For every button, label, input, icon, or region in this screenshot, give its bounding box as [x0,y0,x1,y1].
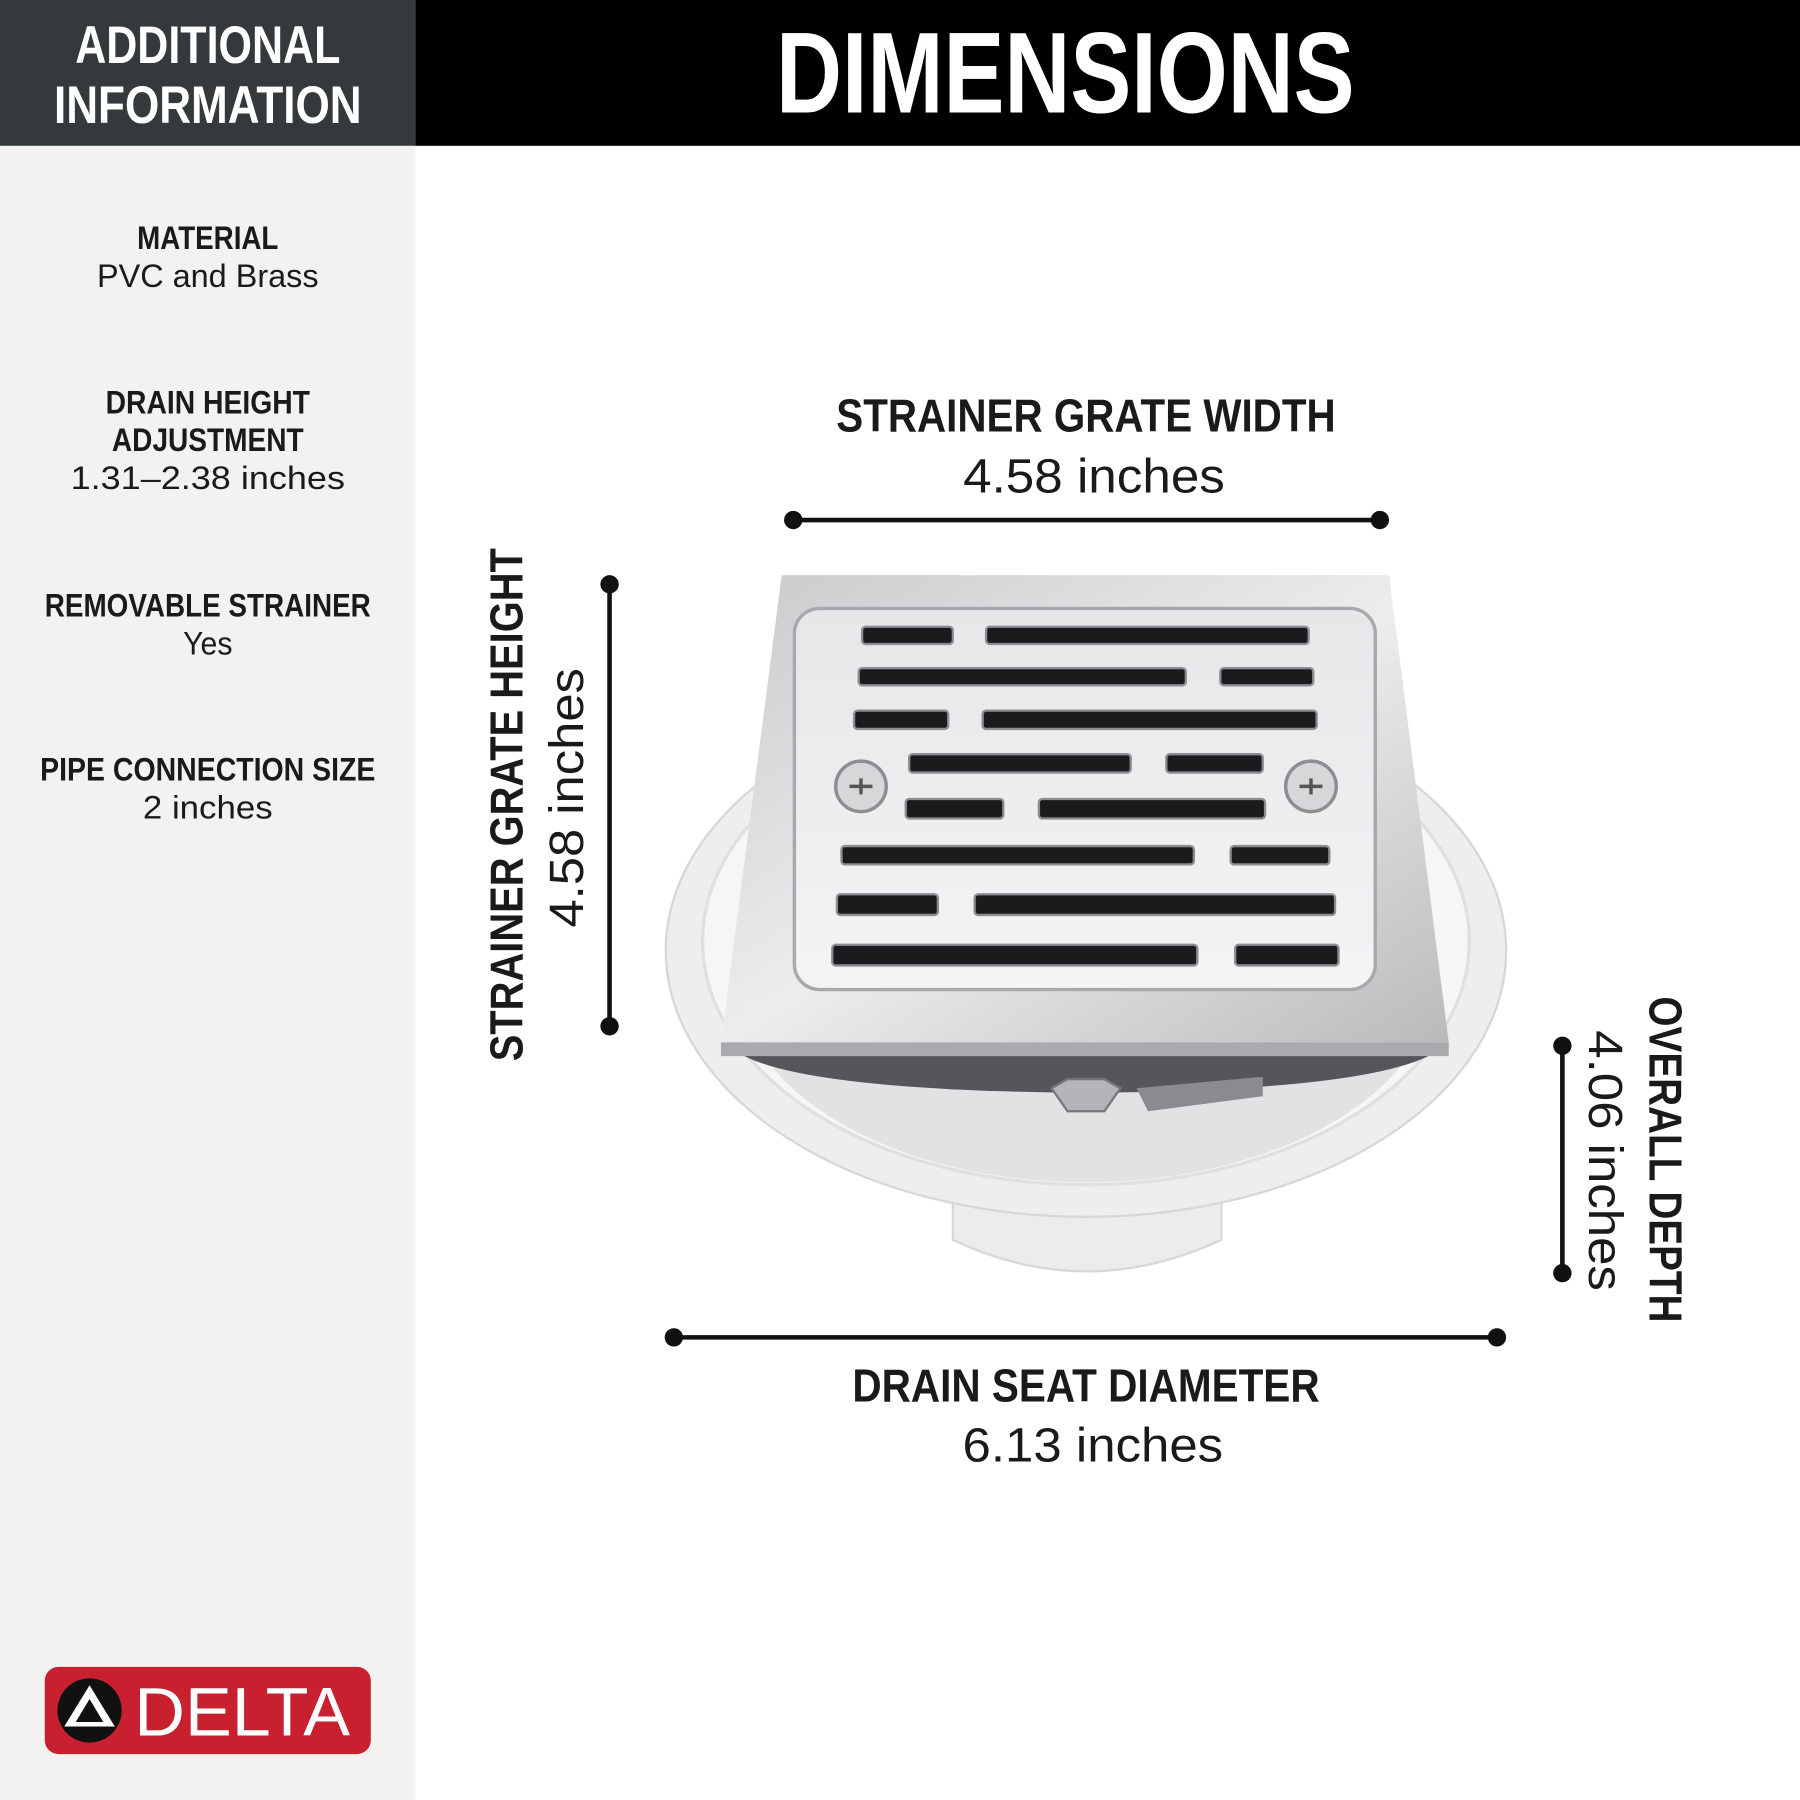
pipe [953,1148,1221,1271]
grate bezel [721,575,1449,1042]
label: strainer grate width [836,390,1336,503]
arrow: diameter dimension line [665,1328,1506,1347]
left header: ADDITIONAL [75,16,340,75]
arrow: depth dimension line [1553,1037,1572,1282]
spec: pipe connection size [40,752,375,825]
spec: drain height adjustment [71,384,345,496]
label: drain seat diameter [852,1360,1320,1472]
label: overall depth: 4.06 inches [1578,1030,1632,1291]
spec: drain height adjustment: 1.31–2.38 inches [71,460,345,496]
title: dimensions [416,0,1800,146]
spec: material: MATERIAL [137,220,278,256]
logo: delta: DELTA [134,1674,350,1751]
slots [832,627,1339,965]
label: drain seat diameter: 6.13 inches [963,1418,1223,1472]
logo: delta [45,1667,371,1754]
screws [836,761,886,812]
product image: drain [666,575,1506,1271]
spec: removable strainer: REMOVABLE STRAINER [45,587,371,623]
label: strainer grate height: 4.58 inches [540,668,594,928]
label: overall depth [1578,996,1692,1322]
arrow: height dimension line [600,575,619,1035]
label: overall depth: OVERALL DEPTH [1640,996,1692,1322]
spec: removable strainer: Yes [183,625,232,661]
grate plate [794,608,1375,990]
label: drain seat diameter: DRAIN SEAT DIAMETER [852,1360,1320,1412]
spec: pipe connection size: 2 inches [143,789,273,825]
spec: pipe connection size: PIPE CONNECTION SIZE [40,752,375,788]
arrow: width dimension line [784,511,1389,529]
left panel background [0,0,416,1800]
spec: drain height adjustment: ADJUSTMENT [112,422,304,458]
drain seat flange [666,684,1506,1217]
nut [1052,1079,1120,1111]
label: strainer grate width: STRAINER GRATE WIDTH [836,390,1336,442]
left header: INFORMATION [54,76,362,135]
spec: material: PVC and Brass [97,258,319,294]
label: strainer grate height [480,548,594,1061]
label: strainer grate height: STRAINER GRATE HEIGHT [480,548,532,1061]
label: strainer grate width: 4.58 inches [963,449,1225,503]
title: dimensions: DIMENSIONS [776,10,1355,137]
spec: drain height adjustment: DRAIN HEIGHT [106,384,310,420]
spec: removable strainer [45,587,371,661]
spec: material [97,220,319,294]
left header [0,0,416,146]
